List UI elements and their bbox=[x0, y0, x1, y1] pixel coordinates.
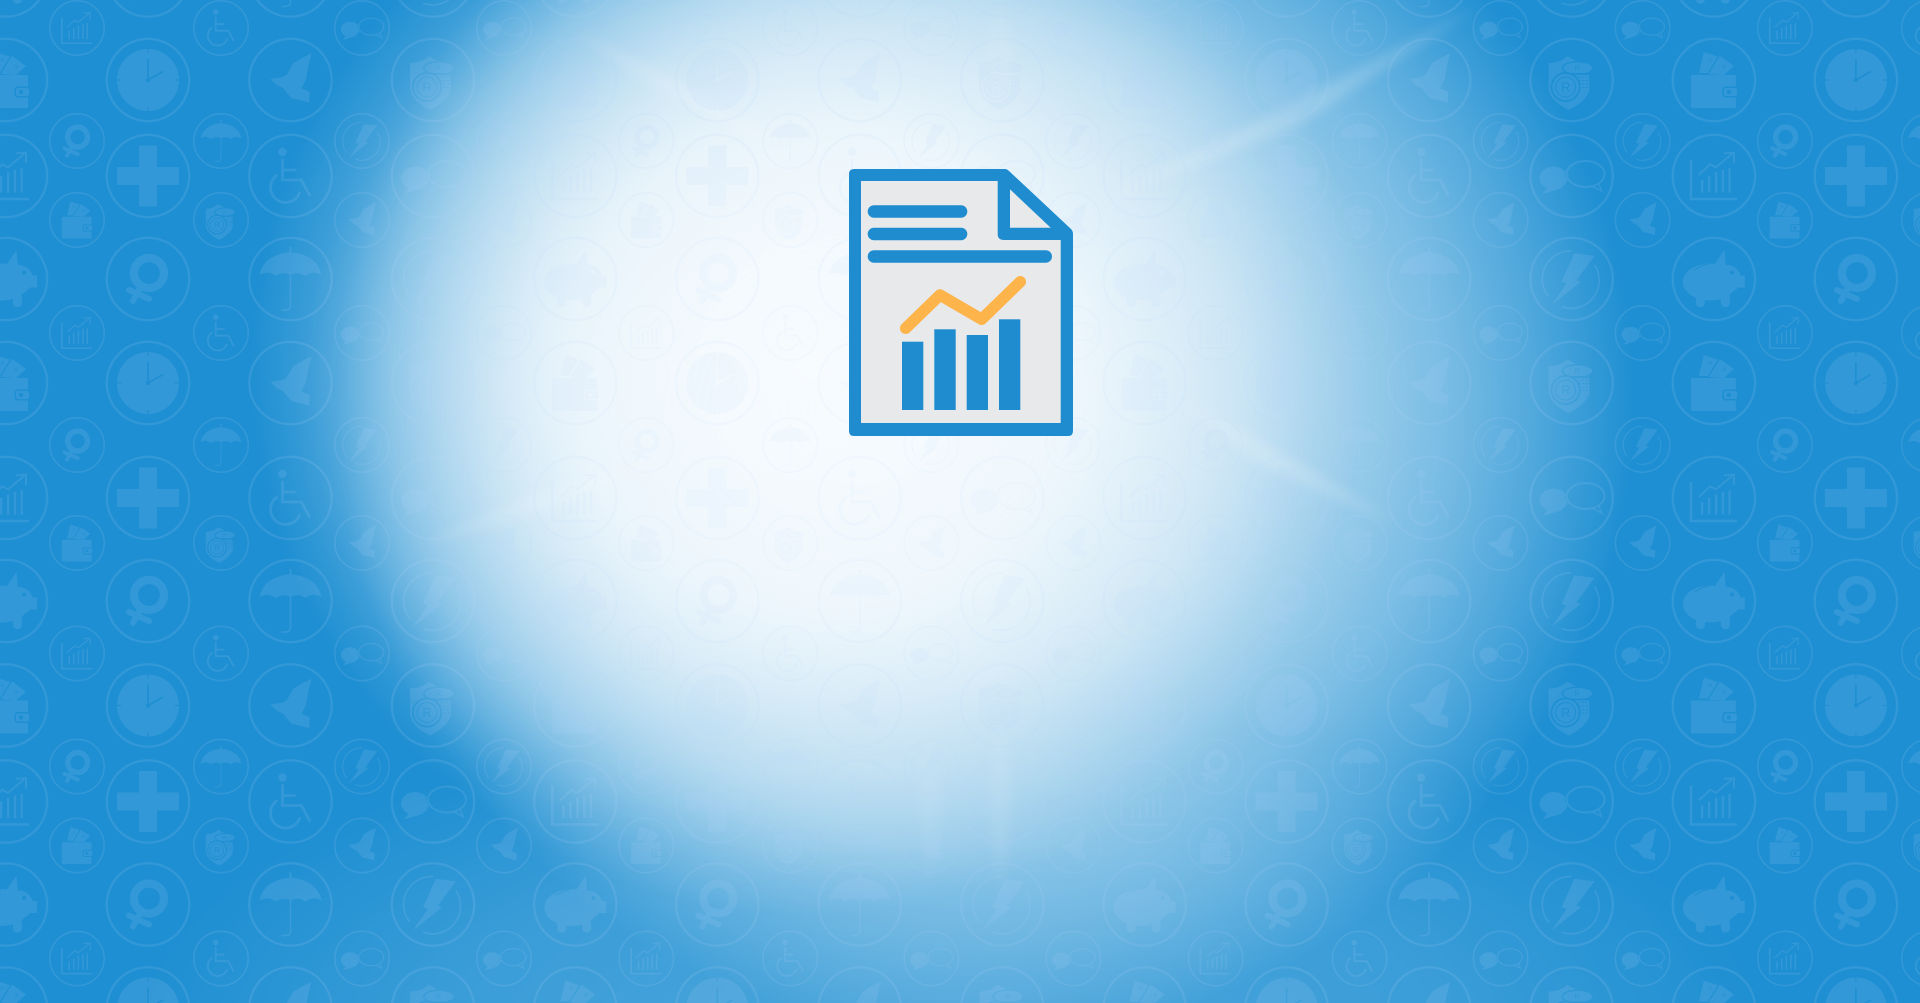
bar chart bbox=[902, 319, 1020, 410]
trend line bbox=[906, 282, 1020, 328]
light rays bbox=[420, 0, 1480, 900]
folded corner bbox=[1010, 189, 1051, 228]
text lines bbox=[868, 205, 1052, 263]
page interior bbox=[861, 181, 1061, 423]
icon: report document with chart bbox=[849, 169, 1073, 436]
document page outline bbox=[849, 169, 1073, 436]
